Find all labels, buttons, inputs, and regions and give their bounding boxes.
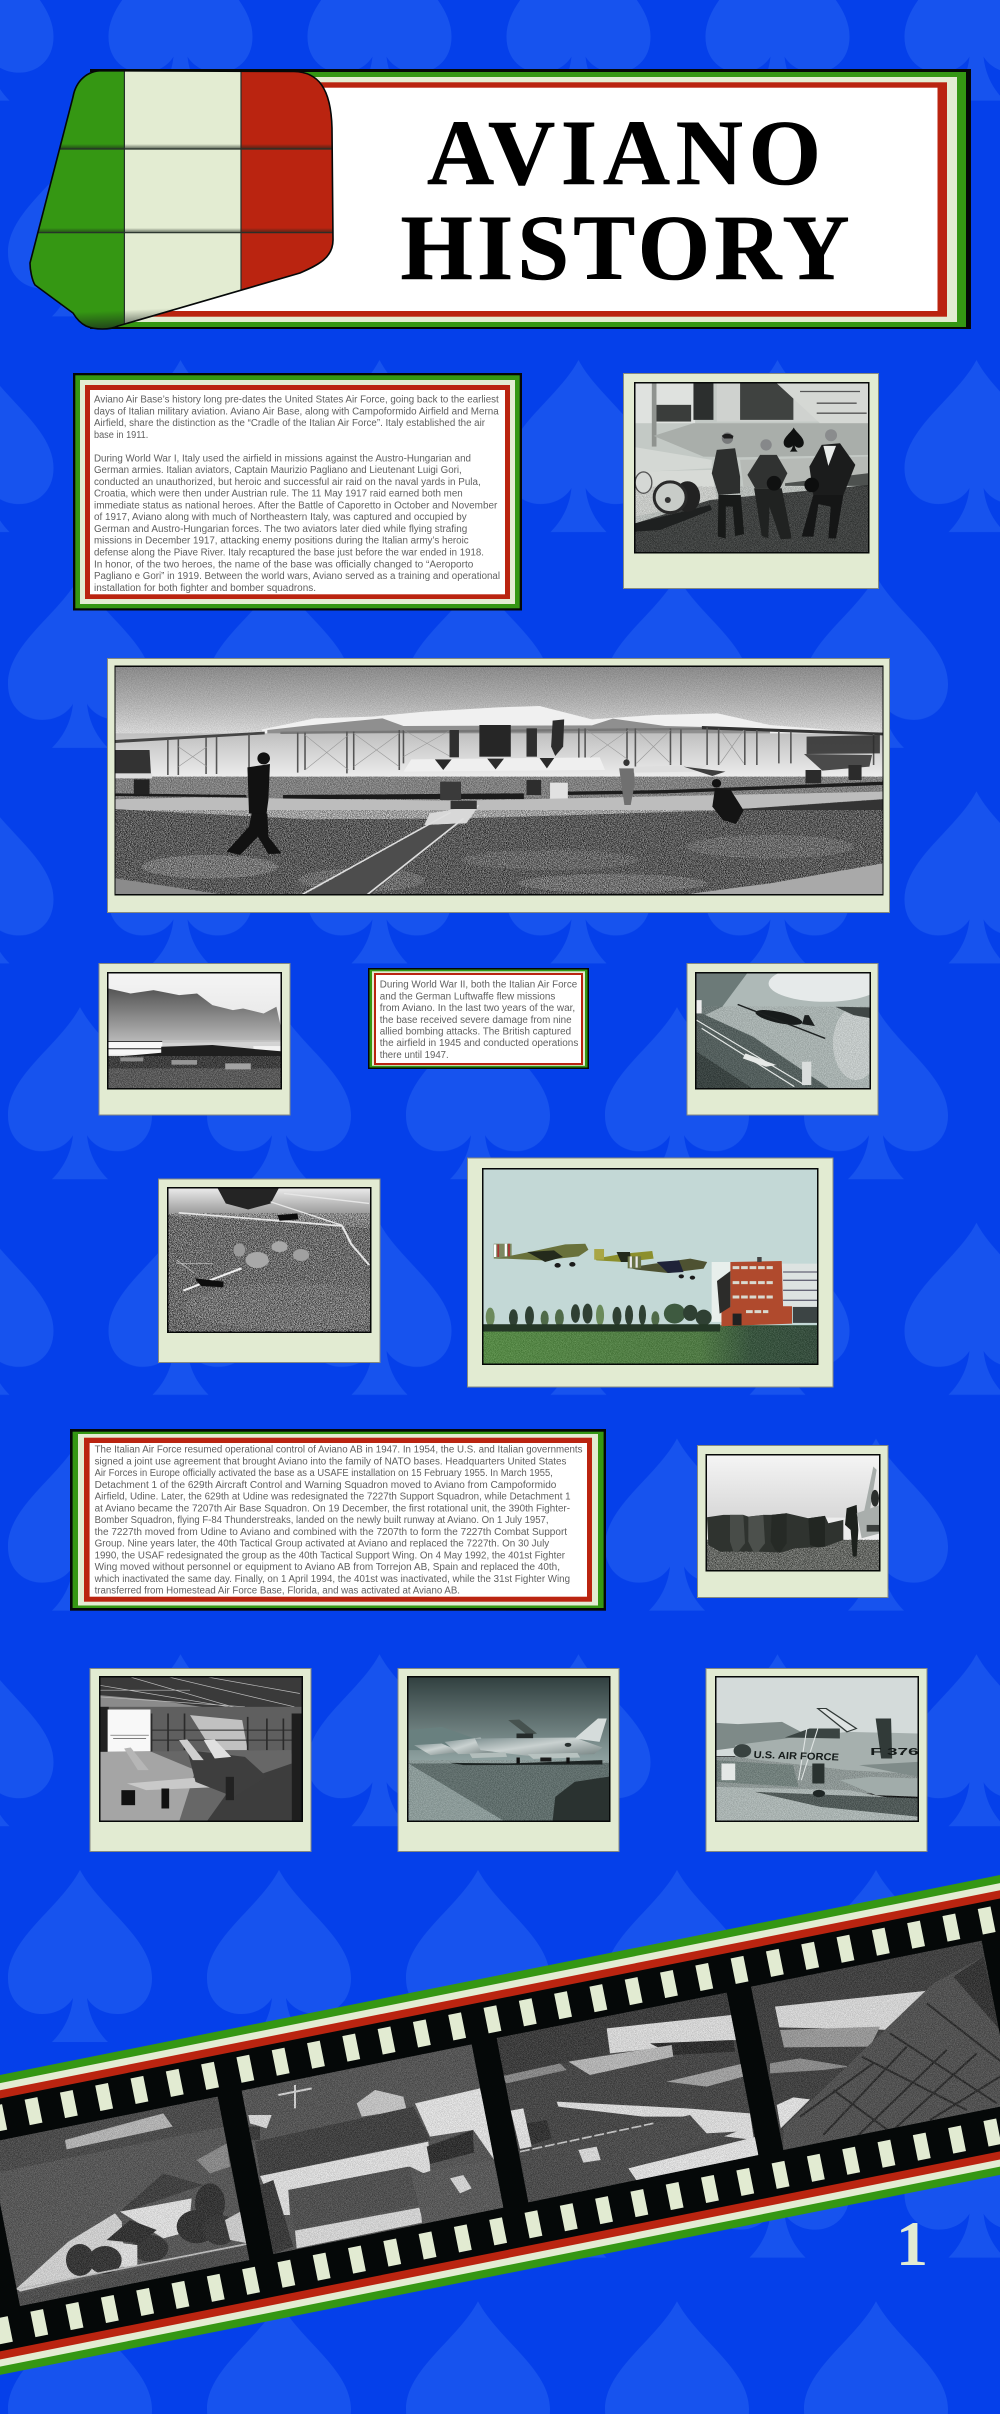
paragraph text: Airfield, Udine. Later, the 629th at Udine was redesignated the 7227th Support Squadron, while Detachment 1: [95, 1492, 571, 1503]
paragraph text: installation for both fighter and bomber squadrons.: [94, 583, 316, 594]
paragraph text: 1990, the USAF redesignated the group as the 40th Tactical Support Wing. On 4 May 1992, the 401st Fighter: [95, 1550, 566, 1561]
film frame 3: [493, 1990, 763, 2207]
paragraph text: The Italian Air Force resumed operational control of Aviano AB in 1947. In 1954, the U.S. and Italian governments: [95, 1445, 582, 1456]
title text: AVIANO: [427, 102, 821, 205]
paragraph text: signed a joint use agreement that brought Aviano into the family of NATO bases. Headquarters United States: [95, 1456, 566, 1467]
photo card: jets in hangar: [90, 1668, 311, 1852]
title banner: [20, 60, 971, 340]
paragraph text: Group. Nine years later, the 40th Tactical Group activated at Aviano and replaced the 7227th. On 30 July: [95, 1539, 549, 1550]
paragraph text: German armies. Italian aviators, Captain Maurizio Pagliano and Lieutenant Luigi Gori,: [94, 465, 462, 476]
photo card: giant biplanes panorama: [108, 658, 890, 912]
film base and tricolour stripes: [0, 1869, 1000, 2381]
page number: 1: [896, 2208, 928, 2279]
paragraph text: of 1917, Aviano along with much of Northeastern Italy, was captured and occupied by: [94, 512, 467, 523]
text panel: post-war history: [70, 1429, 606, 1611]
photo card: officers on parade: [698, 1446, 888, 1598]
paragraph text: there until 1947.: [380, 1050, 449, 1061]
photo card: fighter over harbor: [687, 964, 882, 1115]
photo card: three pilots: [624, 374, 878, 588]
paragraph text: Croatia, which were then under Austrian rule. The 11 May 1917 raid earned both men: [94, 489, 463, 500]
title text: HISTORY: [400, 197, 850, 300]
paragraph text: German and Austro-Hungarian forces. The two aviators later died while flying strafing: [94, 524, 467, 535]
paragraph text: [94, 394, 500, 594]
paragraph text: and the German Luftwaffe flew missions: [380, 991, 555, 1002]
photo card: U.S. Air Force F-100 close-up: [706, 1668, 927, 1852]
paragraph text: Airfield, share the distinction as the “Cradle of the Italian Air Force”. Italy established the air: [94, 418, 486, 429]
photo card: aerial bombing: [158, 1179, 400, 1362]
film frame 1: [0, 2093, 253, 2310]
paragraph text: [94, 1445, 583, 1597]
photo card: F-100 line-up: [398, 1668, 619, 1852]
paragraph text: the base received severe damage from nine: [380, 1015, 572, 1026]
photo card: airfield and mountains: [99, 964, 290, 1115]
paragraph text: the airfield in 1945 and conducted operations: [380, 1038, 578, 1049]
paragraph text: allied bombing attacks. The British captured: [380, 1026, 571, 1038]
paragraph text: base in 1911.: [94, 430, 148, 441]
photo card: U.S. Air Force F-100 close-up: U.S. AIR FORCE: [753, 1749, 839, 1763]
film frame 2: [240, 2043, 507, 2257]
paragraph text: the 7227th moved from Udine to Aviano and combined with the 7207th to form the 7227th Combat Support: [95, 1527, 567, 1538]
paragraph text: Wing moved without personnel or equipment to Aviano AB from Torrejon AB, Spain and replaced the 40th,: [95, 1562, 560, 1573]
paragraph text: Aviano Air Base’s history long pre-dates the United States Air Force, going back to the earliest: [94, 394, 499, 406]
paragraph text: from Aviano. In the last two years of the war,: [380, 1003, 575, 1014]
paragraph text: conducted an unauthorized, but heroic and successful air raid on the naval yards in Pula,: [94, 477, 481, 488]
photo card: colour bombers and red building: [468, 1158, 833, 1387]
paragraph text: transferred from Homestead Air Force Base, Florida, and was activated at Aviano AB.: [95, 1586, 460, 1597]
paragraph text: [380, 980, 578, 1061]
paragraph text: In honor, of the two heroes, the name of the base was officially changed to “Aeroporto: [94, 559, 474, 570]
title text: [400, 102, 850, 300]
icon: folded Italian flag: [29, 72, 334, 330]
text panel: World War II: [368, 968, 589, 1069]
paragraph text: which inactivated the same day. Finally, on 1 April 1994, the 401st was inactivated, while the 31st Fighter Wing: [94, 1574, 570, 1585]
paragraph text: missions in December 1917, attacking enemy positions during the Italian army’s heroic: [94, 536, 469, 547]
paragraph text: Detachment 1 of the 629th Aircraft Control and Warning Squadron moved to Aviano from Campoformido: [95, 1480, 557, 1491]
paragraph text: During World War I, Italy used the airfield in missions against the Austro-Hungarian and: [94, 453, 471, 464]
paragraph text: at Aviano became the 7207th Air Base Squadron. On 19 December, the first rotational unit, the 390th Fighter-: [95, 1503, 570, 1514]
film strip with tricolour edges: [0, 1869, 1000, 2381]
paragraph text: During World War II, both the Italian Air Force: [380, 980, 578, 991]
paragraph text: defense along the Piave River. Italy recaptured the base just before the war ended in 1918.: [94, 548, 484, 558]
paragraph text: Pagliano e Gori” in 1919. Between the world wars, Aviano served as a training and operational: [94, 571, 500, 582]
paragraph text: days of Italian military aviation. Aviano Air Base, along with Campoformido Airfield and Merna: [94, 406, 499, 417]
film frame 4: [750, 1940, 1000, 2153]
paragraph text: immediate status as national heroes. After the Battle of Caporetto in October and November: [94, 500, 498, 511]
photo card: U.S. Air Force F-100 close-up: F 376: [870, 1746, 919, 1757]
banner frame: [90, 69, 971, 329]
paragraph text: Bomber Squadron, flying F-84 Thunderstreaks, landed on the newly built runway at Aviano. On 1 July 1957,: [95, 1515, 548, 1526]
paragraph text: Air Forces in Europe officially activated the base as a USAFE installation on 15 February 1955. In March 1955,: [95, 1468, 553, 1479]
text panel: early history: [73, 373, 522, 610]
